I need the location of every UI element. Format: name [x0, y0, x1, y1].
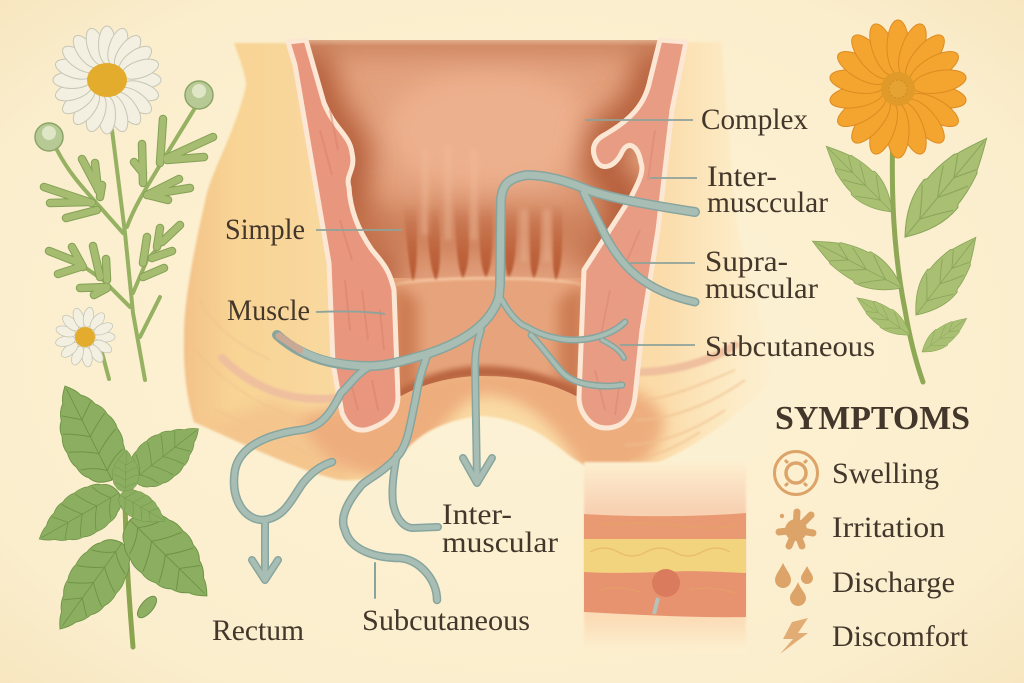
left muscle: [288, 40, 398, 430]
pale fold bands: [222, 345, 735, 399]
symptoms heading: SYMPTOMS: [775, 400, 970, 437]
rectal canal tissue: [308, 40, 658, 396]
label: Rectum: Rectum: [212, 614, 304, 647]
label: Supra-muscular: muscular: [705, 272, 818, 305]
mint leaves: [28, 373, 228, 644]
calendula flower: [828, 20, 968, 158]
chamomile leaflets: [44, 119, 213, 295]
panel: anatomy cross-section: [184, 25, 772, 600]
icon: discharge drops: [775, 563, 813, 606]
irritation text: Irritation: [832, 511, 945, 544]
tract fill: [234, 175, 695, 600]
tissue texture: [590, 523, 740, 593]
label: Inter-musccular: Inter-: [707, 160, 777, 193]
label: Simple: Simple: [225, 213, 305, 246]
inset background: [584, 462, 746, 652]
upper red band: [584, 513, 746, 539]
icon: swelling: [774, 452, 818, 494]
label: Subcutaneous lower: Subcutaneous: [362, 604, 530, 637]
label: Inter-musccular: musccular: [707, 186, 828, 219]
panel: symptoms: [774, 400, 970, 654]
tract outlines: [234, 175, 695, 600]
mint stem: [125, 500, 133, 647]
icon: discomfort bolt: [780, 618, 808, 654]
label: Inter-muscular lower: muscular: [442, 526, 558, 559]
large chamomile flower: [53, 26, 161, 134]
label: Inter-muscular lower: Inter-: [442, 498, 512, 531]
plant: calendula: [804, 20, 1004, 382]
chamomile stems: [57, 108, 195, 380]
anal crypts: [403, 205, 562, 281]
right muscle with fold: [579, 40, 686, 428]
swelling text: Swelling: [832, 457, 939, 490]
discharge text: Discharge: [832, 566, 955, 599]
tract stub: [654, 598, 658, 614]
calendula stem: [892, 128, 923, 382]
icon: irritation splat: [779, 512, 813, 546]
nodule: [652, 569, 680, 597]
fatty tissue: [184, 42, 772, 490]
chamomile buds: [35, 81, 213, 151]
fistula tracts: [234, 175, 695, 600]
top fade: [308, 40, 658, 45]
label: Muscle: Muscle: [227, 294, 310, 327]
discomfort text: Discomfort: [832, 620, 969, 653]
plant: chamomile: [35, 26, 213, 380]
lower red band: [584, 571, 746, 617]
yellow fat band: [584, 539, 746, 574]
calendula leaves: [804, 124, 1004, 360]
label: Supra-muscular: Supra-: [705, 245, 788, 278]
panel: tissue inset: [584, 462, 746, 652]
label: Subcutaneous right: Subcutaneous: [705, 330, 875, 363]
mint small leaf: [134, 593, 160, 621]
leader lines: [316, 120, 697, 345]
label: Complex: Complex: [701, 103, 808, 136]
small chamomile flower: [55, 307, 115, 367]
plant: mint: [28, 373, 228, 647]
